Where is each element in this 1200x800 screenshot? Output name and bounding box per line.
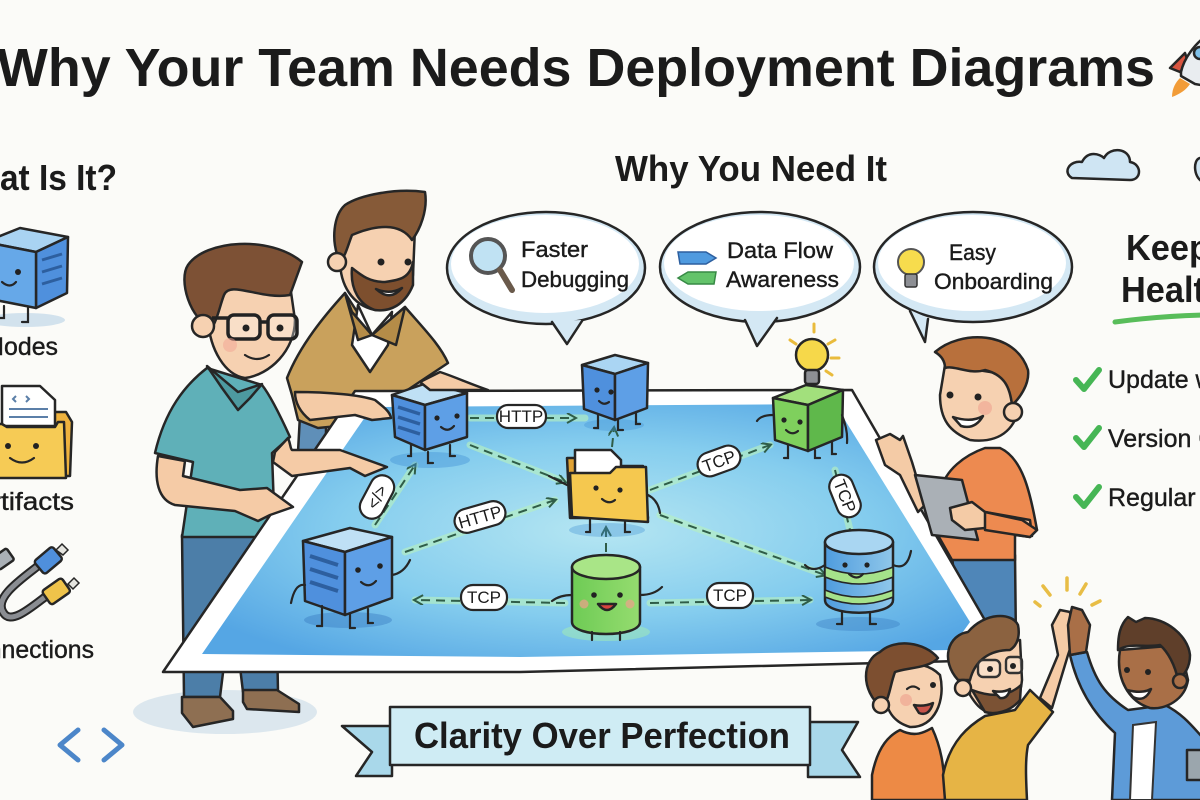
panel: what is it items (0, 228, 94, 664)
icon: high five sparkles (1035, 578, 1100, 606)
speech bubble: data flow awareness: Awareness (726, 267, 839, 292)
banner: clarity over perfection (342, 707, 860, 777)
person: man with tablet upper (876, 337, 1037, 540)
speech bubble: easy onboarding: Easy (949, 240, 996, 265)
speech bubble: easy onboarding (874, 212, 1072, 342)
pill: HTTP top: HTTP (499, 407, 543, 426)
person: bearded man arms (295, 372, 488, 420)
heading: keep healthy (1115, 227, 1200, 322)
node: large server cube (291, 528, 410, 628)
pill: TCP bottom left (461, 585, 507, 610)
node: folder (549, 450, 660, 537)
speech bubble: faster debugging: Faster (521, 237, 588, 262)
speech bubble: faster debugging (447, 212, 645, 344)
pill: code (356, 471, 398, 523)
pill: TCP upper right: TCP (700, 447, 738, 476)
title: Why Your Team Needs Deployment Diagrams (0, 38, 1155, 98)
person: man in blue (1068, 607, 1200, 800)
node: green cube with bulb (757, 324, 847, 458)
icon: rocket (1170, 36, 1200, 97)
checklist (1076, 366, 1200, 512)
label pills (356, 405, 864, 610)
table map (163, 390, 986, 672)
pill: TCP upper right (694, 442, 744, 480)
person: glasses man legs and torso (155, 368, 299, 727)
heading: why you need it: Why You Need It (615, 148, 887, 189)
node: database cylinder (805, 530, 911, 631)
icon: cloud (1067, 150, 1139, 180)
banner: clarity over perfection: Clarity Over Perfection (414, 715, 790, 756)
node: green cylinder (552, 555, 662, 641)
person: man in yellow (943, 610, 1073, 800)
icon: artifacts folder (0, 386, 72, 478)
speech bubble: data flow awareness: Data Flow (727, 238, 833, 263)
person: boy in orange (866, 643, 945, 800)
node: top server cube (390, 383, 470, 468)
person: bearded man body (287, 191, 448, 452)
pill: TCP bottom right (707, 583, 753, 608)
shadow under left man (133, 690, 317, 734)
pill: HTTP middle (452, 498, 508, 536)
node: top blue cube (582, 355, 648, 431)
pill: TCP bottom left: TCP (467, 588, 501, 607)
pill: HTTP middle: HTTP (456, 502, 504, 533)
icon: node cube (0, 228, 68, 327)
icon: connection cables (0, 544, 79, 617)
person: tablet man legs and torso (935, 448, 1037, 645)
pill: TCP bottom right: TCP (713, 586, 747, 605)
icon: bulb (790, 324, 839, 384)
pill: code: </> (363, 482, 392, 513)
speech bubble: faster debugging: Debugging (521, 267, 629, 292)
icon: cloud partial (1195, 158, 1200, 182)
pill: TCP right: TCP (829, 477, 860, 516)
speech bubble: easy onboarding: Onboarding (934, 269, 1053, 294)
speech bubble: data flow awareness (660, 212, 860, 346)
pill: TCP right (826, 471, 864, 521)
icon: code chevrons (60, 730, 122, 760)
connection lines (375, 418, 850, 603)
person: man with glasses upper (157, 244, 387, 521)
